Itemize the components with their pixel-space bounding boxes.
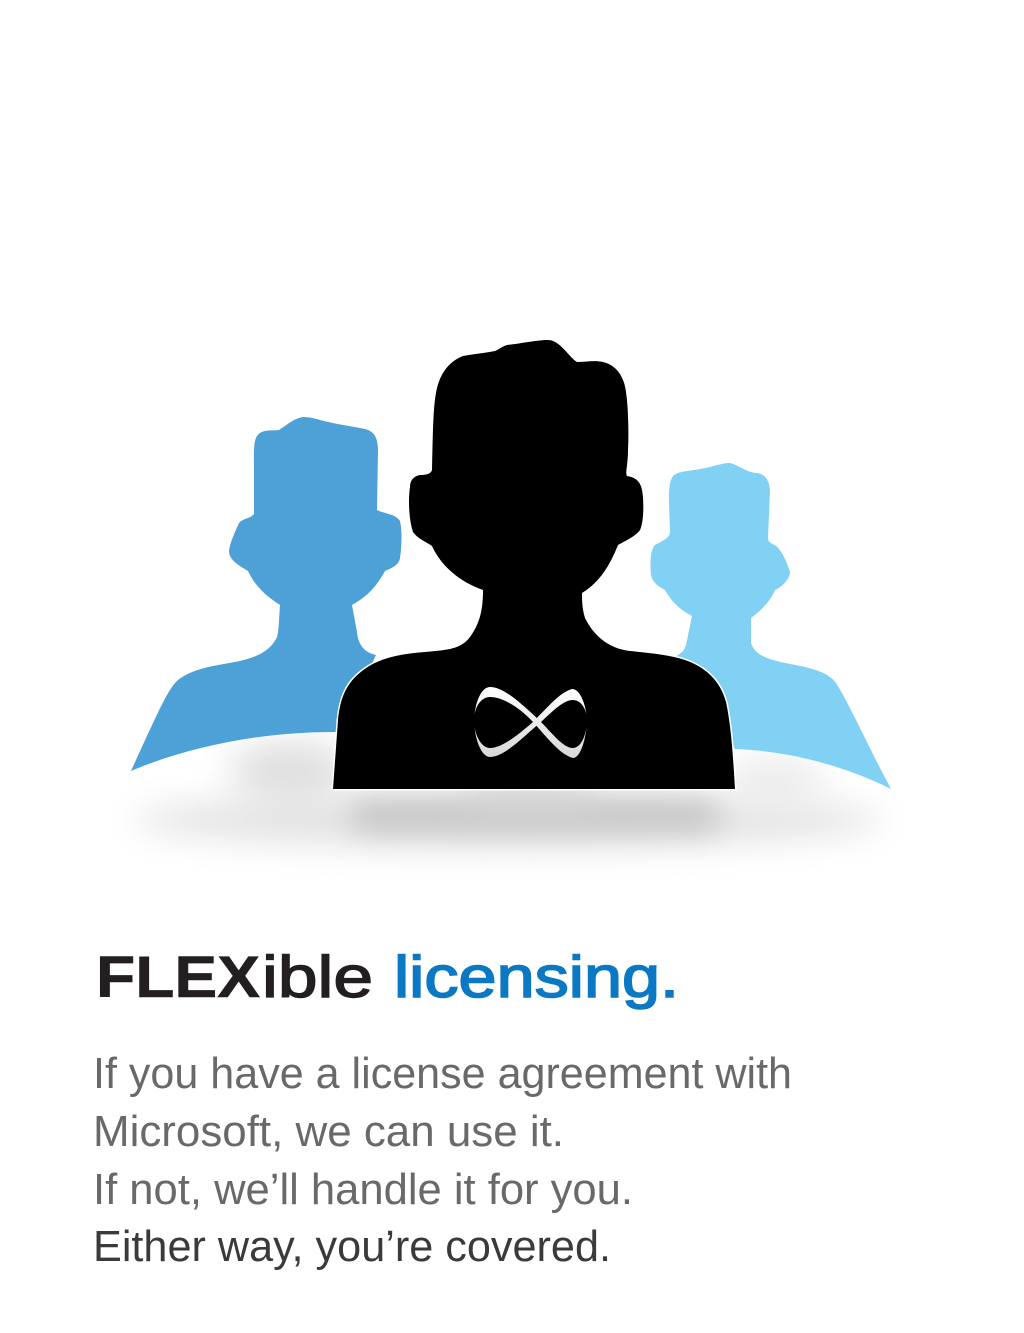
heading	[96, 945, 679, 1010]
heading: licensing.	[394, 945, 679, 1010]
body text: If you have a license agreement with	[93, 1049, 792, 1098]
icon: right light blue person	[650, 463, 891, 789]
icon: left blue person	[131, 417, 402, 771]
icon: central black person	[333, 340, 735, 789]
body text: If not, we’ll handle it for you.	[93, 1165, 633, 1214]
body text	[93, 1049, 792, 1271]
icon: infinity logo	[474, 687, 586, 758]
ground shadow	[133, 740, 883, 847]
body text: Microsoft, we can use it.	[93, 1107, 564, 1156]
heading: ible	[262, 945, 373, 1010]
body text: Either way, you’re covered.	[93, 1222, 611, 1271]
heading: FLEX	[96, 945, 260, 1010]
